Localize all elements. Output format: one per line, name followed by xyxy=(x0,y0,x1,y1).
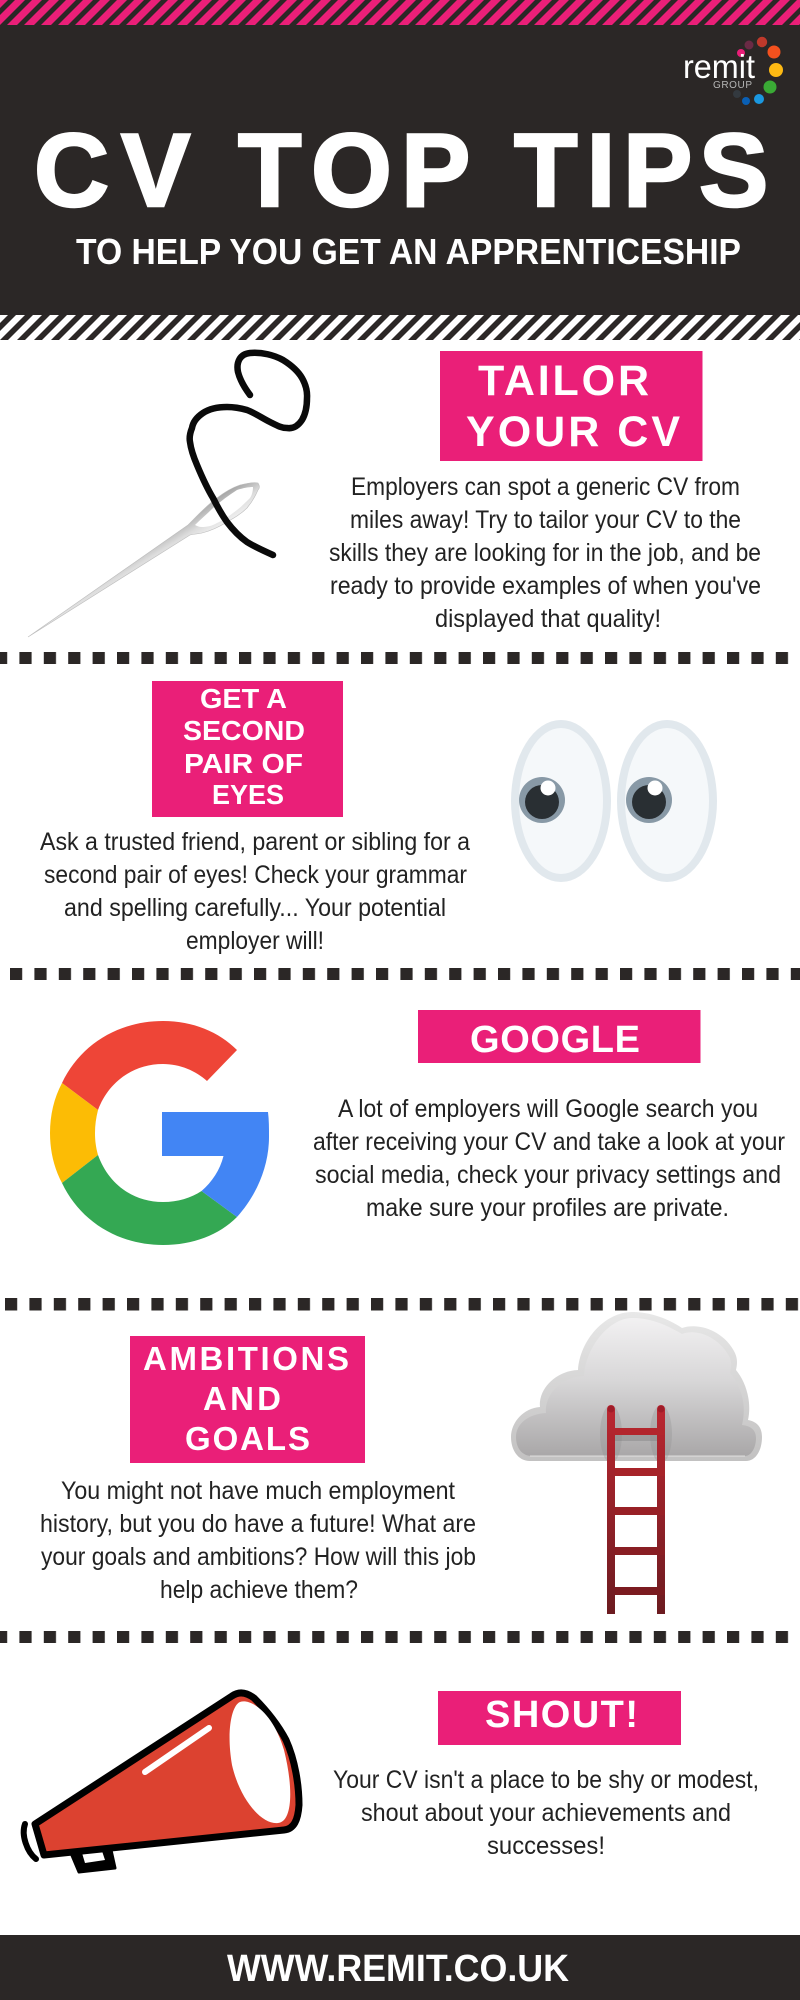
heading: get a second pair of eyes: EYES xyxy=(212,779,284,810)
panel: shout xyxy=(24,1691,759,1872)
body text: second pair of eyes: second pair of eyes! Check your grammar xyxy=(44,861,467,889)
icon: google g xyxy=(50,1021,269,1245)
body text: second pair of eyes xyxy=(40,828,470,955)
body text: tailor: skills they are looking for in the job, and be xyxy=(329,539,761,567)
heading: tailor your cv xyxy=(440,351,702,461)
body text: tailor: ready to provide examples of when you've xyxy=(330,572,761,600)
heading: get a second pair of eyes: GET A xyxy=(200,683,287,714)
heading: ambitions and goals: AMBITIONS xyxy=(143,1340,349,1377)
body text: second pair of eyes: and spelling carefully... Your potential xyxy=(64,894,446,922)
icon: cloud and ladder xyxy=(511,1312,762,1614)
logo: remit group: GROUP xyxy=(713,80,752,91)
heading: tailor your cv: YOUR CV xyxy=(466,408,680,456)
heading: get a second pair of eyes xyxy=(152,681,343,817)
body text: second pair of eyes: employer will! xyxy=(186,927,324,955)
heading: ambitions and goals: GOALS xyxy=(185,1420,310,1457)
body text: google: make sure your profiles are private. xyxy=(366,1194,729,1222)
panel: header banner xyxy=(0,0,800,340)
body text: tailor: displayed that quality! xyxy=(435,605,661,633)
body text: ambitions: your goals and ambitions? How will this job xyxy=(41,1543,476,1571)
heading: shout xyxy=(438,1691,681,1745)
heading: ambitions and goals: AND xyxy=(203,1380,281,1417)
body text: google: A lot of employers will Google search you xyxy=(338,1095,758,1123)
title: CV TOP TIPS xyxy=(34,113,768,229)
subtitle: TO HELP YOU GET AN APPRENTICESHIP xyxy=(76,231,741,272)
body text: tailor: Employers can spot a generic CV from xyxy=(351,473,740,501)
body text: second pair of eyes: Ask a trusted friend, parent or sibling for a xyxy=(40,828,470,856)
panel: second pair of eyes xyxy=(40,681,717,955)
body text: ambitions: You might not have much employment xyxy=(61,1477,455,1505)
body text: shout: Your CV isn't a place to be shy or modest, xyxy=(333,1766,759,1794)
body text: shout: shout about your achievements and xyxy=(361,1799,731,1827)
heading: google xyxy=(418,1010,700,1063)
footer: website: WWW.REMIT.CO.UK xyxy=(227,1948,570,1990)
icon: megaphone xyxy=(24,1693,299,1872)
body text: google xyxy=(313,1095,785,1222)
logo: remit group: remit xyxy=(683,48,755,85)
body text: ambitions: help achieve them? xyxy=(160,1576,358,1604)
panel: ambitions and goals xyxy=(40,1312,762,1614)
body text: tailor: miles away! Try to tailor your CV to the xyxy=(350,506,741,534)
heading: google: GOOGLE xyxy=(470,1019,640,1061)
body text: ambitions: history, but you do have a future! What are xyxy=(40,1510,476,1538)
panel: tailor your cv xyxy=(28,351,761,637)
panel: google xyxy=(50,1010,785,1245)
icon: eyes xyxy=(511,720,717,882)
body text: shout xyxy=(333,1766,759,1860)
logo: remit group xyxy=(683,37,783,105)
body text: ambitions xyxy=(40,1477,476,1604)
footer: website xyxy=(0,1935,800,2000)
body text: shout: successes! xyxy=(487,1832,605,1860)
heading: shout: SHOUT! xyxy=(485,1694,638,1736)
heading: tailor your cv: TAILOR xyxy=(478,357,649,405)
heading: get a second pair of eyes: PAIR OF xyxy=(184,748,303,779)
icon: needle and thread xyxy=(28,353,307,637)
body text: tailor xyxy=(329,473,761,633)
heading: ambitions and goals xyxy=(130,1336,365,1463)
heading: get a second pair of eyes: SECOND xyxy=(183,715,305,746)
